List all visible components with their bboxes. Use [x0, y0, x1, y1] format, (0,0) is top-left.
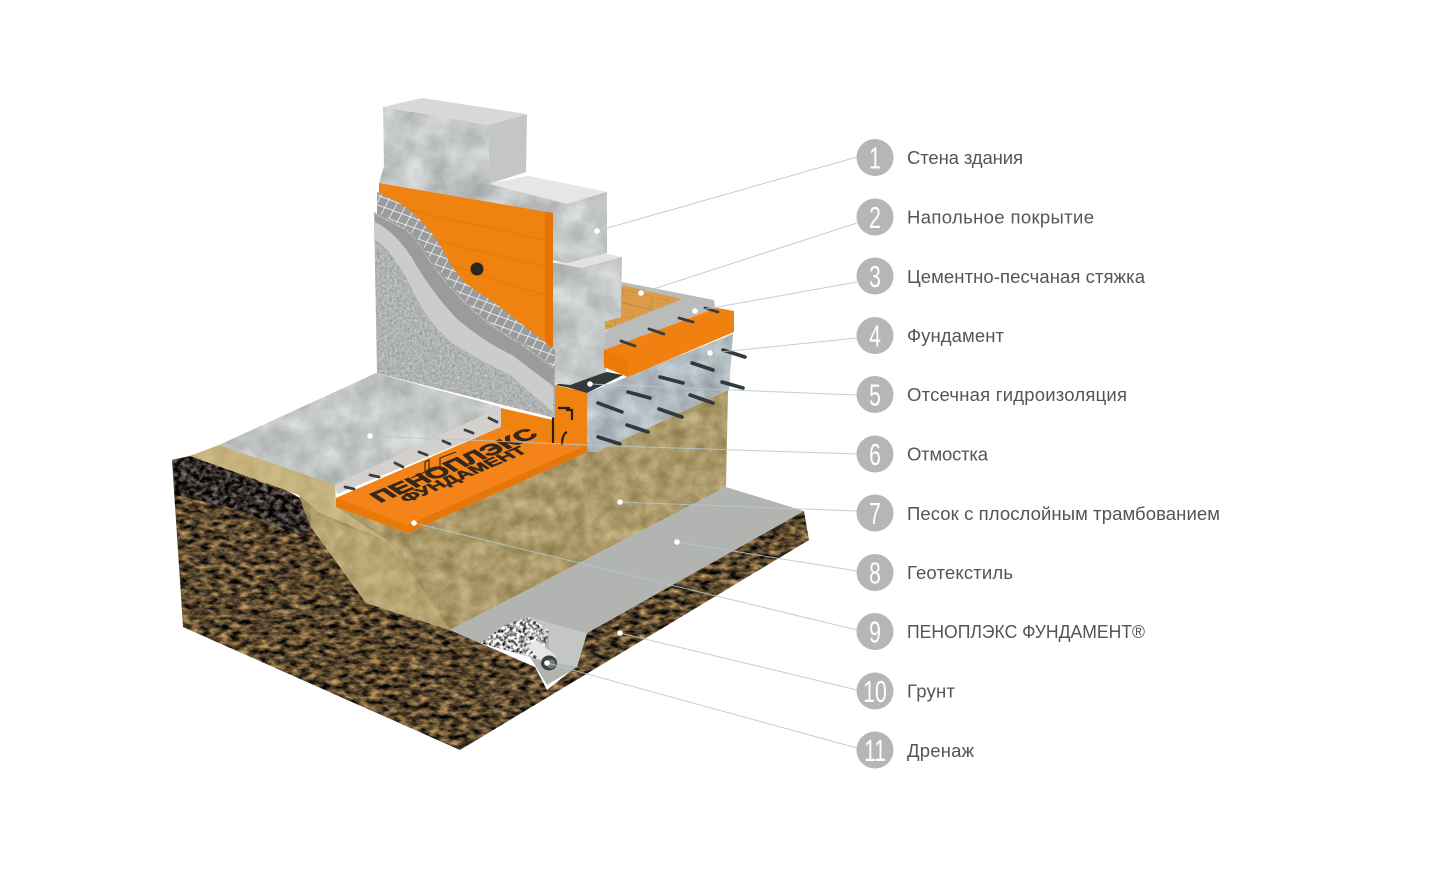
drainage: gravel and pipe [480, 617, 557, 670]
legend item 4: 4 [869, 318, 881, 354]
legend item 6: Отмостка [907, 444, 989, 464]
legend item 2: 2 [869, 200, 881, 235]
legend item 4 [856, 317, 1005, 354]
legend item 11: Дренаж [907, 740, 975, 761]
legend item 1: Стена здания [907, 147, 1023, 168]
paving slab (otmostka) [219, 373, 501, 494]
concrete foundation [587, 334, 745, 452]
wall blocks [379, 98, 734, 385]
legend item 9 [856, 613, 1145, 650]
legend item 1: 1 [869, 140, 881, 176]
sand embankment [190, 390, 728, 630]
legend item 8: Геотекстиль [907, 562, 1013, 583]
legend item 3 [856, 258, 1146, 294]
legend item 7: Песок с плослойным трамбованием [907, 503, 1220, 524]
geotextile trench [450, 487, 804, 685]
soil block [172, 450, 809, 750]
legend item 11 [856, 732, 975, 768]
legend item 8: 8 [869, 555, 881, 591]
legend item 6: 6 [869, 437, 881, 472]
legend item 7 [856, 494, 1220, 532]
legend item 7: 7 [869, 496, 881, 531]
legend item 5: 5 [869, 377, 881, 413]
legend item 9: 9 [869, 614, 881, 650]
legend item 11: 11 [864, 733, 886, 768]
legend item 3: 3 [869, 259, 881, 294]
plaster layers [374, 212, 555, 418]
legend item 6 [856, 436, 989, 472]
legend item 10: 10 [863, 674, 887, 709]
legend item 2 [856, 198, 1094, 236]
reinforcing mesh [377, 192, 555, 368]
orange edge insulation [604, 308, 734, 377]
second block [379, 166, 607, 263]
legend item 1 [856, 139, 1023, 176]
legend item 10: Грунт [907, 680, 956, 702]
legend [856, 139, 1220, 768]
cutoff waterproofing [555, 372, 623, 393]
anchor [470, 262, 484, 276]
floor structure [604, 282, 734, 377]
marker dots [367, 228, 713, 666]
leader lines [370, 157, 857, 748]
third block [552, 257, 622, 328]
legend item 5: Отсечная гидроизоляция [907, 384, 1127, 405]
legend item 5 [856, 376, 1127, 413]
legend item 3: Цементно-песчаная стяжка [907, 266, 1146, 287]
wall insulation board [379, 183, 553, 390]
topsoil layer [172, 456, 311, 536]
horizontal and vertical insulation [336, 385, 587, 533]
mortar layer [377, 192, 555, 418]
insulation brand text: ПЕНОПЛЭКС [365, 425, 544, 506]
legend item 2: Напольное покрытие [907, 206, 1094, 228]
legend item 9: ПЕНОПЛЭКС ФУНДАМЕНТ® [907, 621, 1145, 642]
insulation brand text: ФУНДАМЕНТ [395, 444, 531, 505]
legend item 8 [856, 554, 1013, 591]
legend item 10 [856, 672, 956, 710]
legend item 4: Фундамент [907, 325, 1005, 346]
illustration: foundation cross-section [172, 98, 809, 750]
top block [383, 107, 489, 184]
lower block [552, 318, 606, 385]
